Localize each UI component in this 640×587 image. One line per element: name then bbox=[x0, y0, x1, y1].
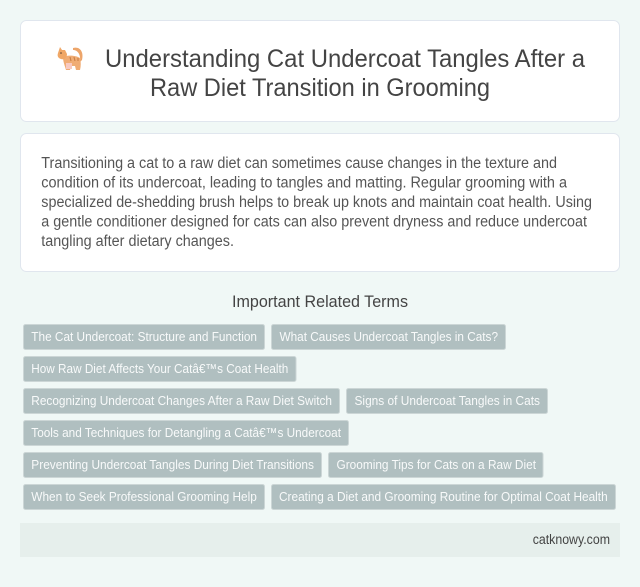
tag: Grooming Tips for Cats on a Raw Diet bbox=[336, 457, 536, 472]
panel: intro paragraph: condition of its undercoat, leading to tangles and matting. Regular grooming with a bbox=[41, 174, 567, 192]
panel: title card bbox=[20, 20, 620, 122]
footer bar: catknowy.com bbox=[533, 532, 610, 547]
tag: Creating a Diet and Grooming Routine for Optimal Coat Health bbox=[279, 489, 608, 504]
tag: When to Seek Professional Grooming Help bbox=[31, 489, 257, 504]
panel: intro paragraph bbox=[20, 134, 620, 272]
footer bar bbox=[20, 523, 620, 557]
tag bbox=[328, 452, 543, 478]
tag: What Causes Undercoat Tangles in Cats? bbox=[280, 329, 498, 344]
panel: intro paragraph: a gentle conditioner designed for cats can also prevent dryness and reduce undercoat bbox=[41, 214, 588, 230]
tag: The Cat Undercoat: Structure and Function bbox=[31, 329, 257, 344]
tag: Recognizing Undercoat Changes After a Raw Diet Switch bbox=[31, 393, 332, 408]
tag bbox=[24, 420, 348, 446]
title text: Raw Diet Transition in Grooming bbox=[150, 74, 490, 102]
tag bbox=[24, 484, 264, 510]
tag bbox=[24, 452, 322, 478]
tag: Signs of Undercoat Tangles in Cats bbox=[354, 393, 540, 408]
tag bbox=[24, 324, 264, 350]
tag bbox=[24, 388, 340, 414]
tag: Tools and Techniques for Detangling a Catâ€™s Undercoat bbox=[31, 425, 341, 440]
panel: intro paragraph: specialized de-shedding brush helps to break up knots and maintain coat health. Using bbox=[41, 194, 592, 211]
title text: Understanding Cat Undercoat Tangles After a bbox=[105, 45, 585, 73]
tag bbox=[24, 356, 296, 382]
tag bbox=[346, 388, 548, 414]
panel: intro paragraph: tangling after dietary changes. bbox=[41, 233, 234, 250]
tag bbox=[272, 324, 506, 350]
title text bbox=[105, 45, 585, 102]
tag: Preventing Undercoat Tangles During Diet Transitions bbox=[31, 457, 314, 472]
tag bbox=[272, 484, 616, 510]
heading: important related terms: Important Related Terms bbox=[232, 293, 408, 311]
related term tags bbox=[24, 324, 616, 510]
panel: intro paragraph: Transitioning a cat to a raw diet can sometimes cause changes in the texture and bbox=[41, 155, 557, 172]
icon: cat bbox=[58, 47, 83, 70]
tag: How Raw Diet Affects Your Catâ€™s Coat Health bbox=[31, 361, 288, 376]
